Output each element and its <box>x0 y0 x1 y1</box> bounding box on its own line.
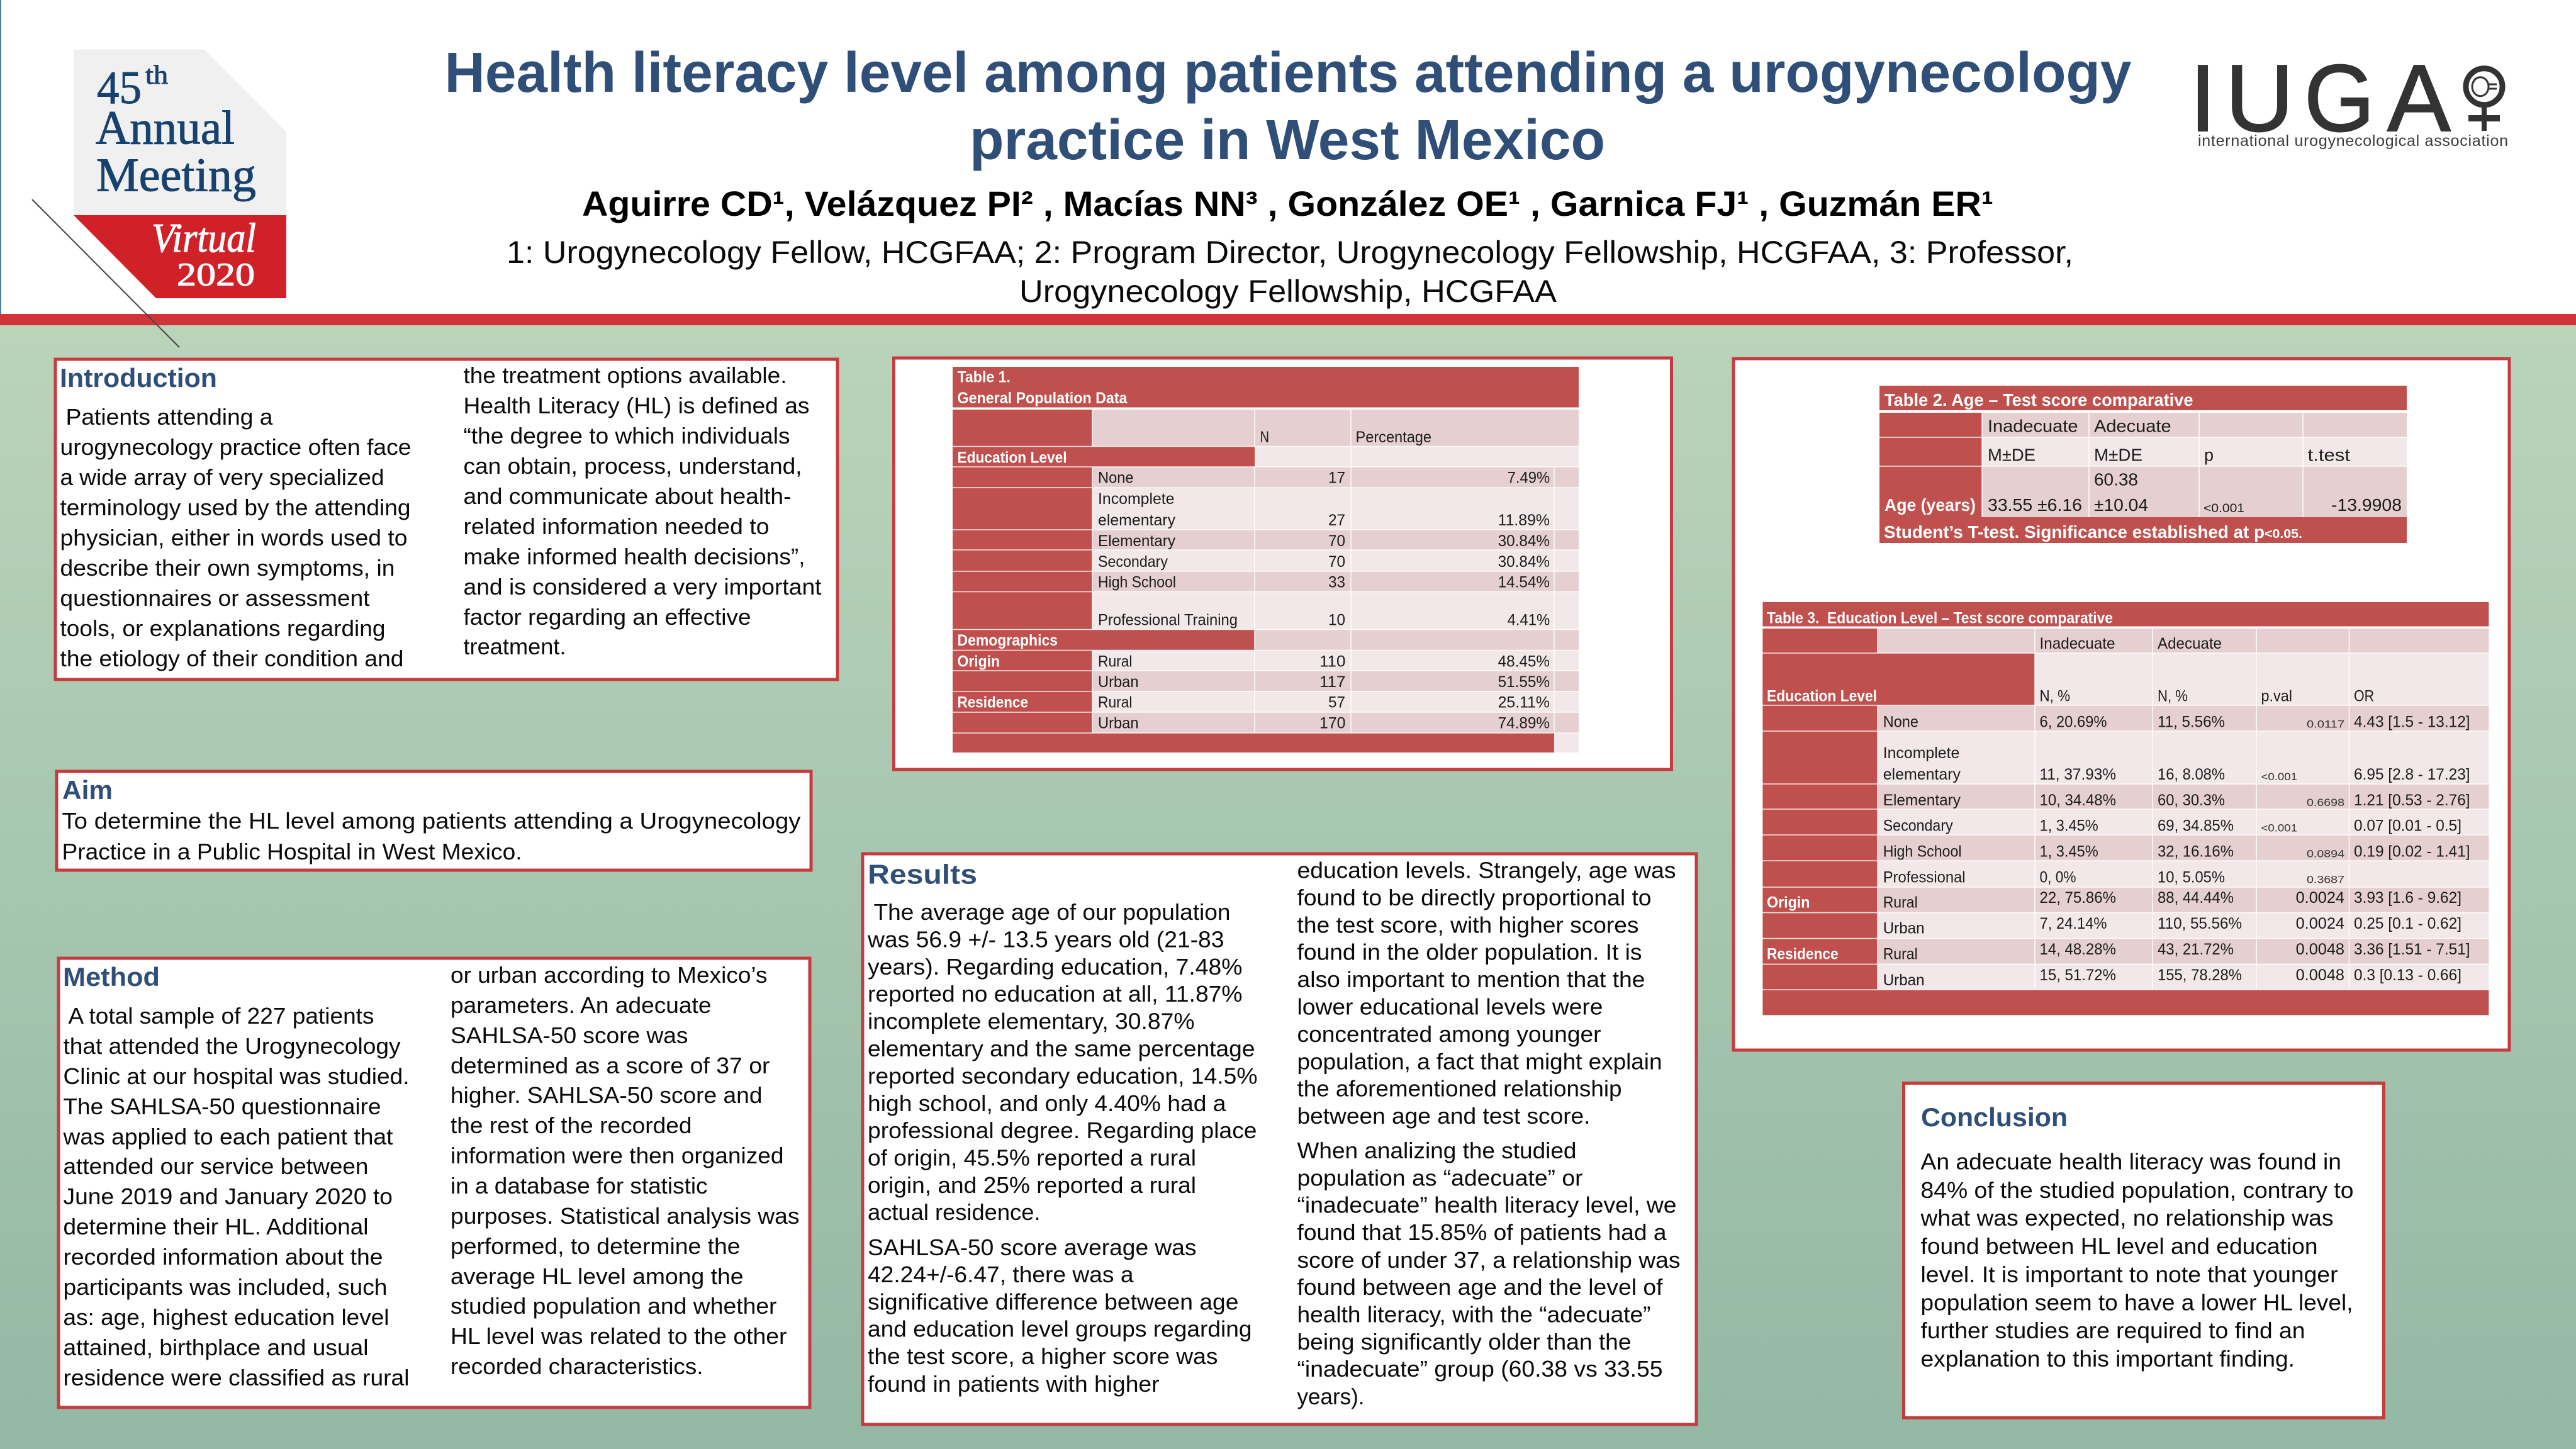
text block: results left column: and education level groups regarding <box>868 1316 1252 1341</box>
table 1 row headers: Residence <box>958 693 1028 711</box>
logo: 45th Annual Meeting Virtual 2020: th <box>145 61 168 90</box>
table 3 data: 11, 37.93% <box>2040 766 2116 783</box>
table 2 data: M±DE <box>2094 445 2142 465</box>
text block: conclusion: level. It is important to note that younger <box>1920 1262 2338 1287</box>
text block: aim: Practice in a Public Hospital in West Mexico. <box>62 839 522 864</box>
table 3 data: 0.25 [0.1 - 0.62] <box>2354 915 2461 932</box>
text block: introduction left column: Patients attending a <box>65 404 273 430</box>
heading: introduction: Introduction <box>60 363 217 393</box>
table 3 data: Inadecuate <box>2040 635 2115 652</box>
logo: 45th Annual Meeting Virtual 2020: Meeting <box>96 148 256 201</box>
logo: 45th Annual Meeting Virtual 2020 <box>74 49 286 298</box>
table 3 data: Urban <box>1883 971 1925 989</box>
table 3 data: Professional <box>1883 869 1966 887</box>
text block: introduction right column: Health Literacy (HL) is defined as <box>463 393 809 418</box>
text block: results right column: found to be directly proportional to <box>1297 885 1651 910</box>
table 1 data: 33 <box>1328 574 1345 591</box>
text block: results right column: concentrated among younger <box>1297 1021 1601 1047</box>
title <box>444 42 2132 172</box>
table 3 data: 110, 55.56% <box>2158 915 2242 932</box>
text block: method left column: recorded information about the <box>63 1244 383 1270</box>
text block: method right column: parameters. An adecuate <box>451 992 711 1018</box>
logo: 45th Annual Meeting Virtual 2020: 45 <box>97 62 142 114</box>
table 1 data: 70 <box>1328 532 1345 550</box>
table 1 data: 7.49% <box>1508 469 1550 487</box>
table 1 data: 170 <box>1319 715 1345 732</box>
table 3 data: 0.3 [0.13 - 0.66] <box>2354 966 2461 984</box>
table 1 data: Urban <box>1098 673 1139 691</box>
table 3 data: 3.36 [1.51 - 7.51] <box>2354 941 2470 958</box>
logo: 45th Annual Meeting Virtual 2020: Virtual <box>152 215 256 261</box>
table 1 data: Percentage <box>1355 428 1431 446</box>
table 3 data: 11, 5.56% <box>2158 713 2225 731</box>
text block: conclusion <box>1920 1149 2353 1372</box>
logo: 45th Annual Meeting Virtual 2020: Annual <box>96 102 235 155</box>
text block: results right column: score of under 37, a relationship was <box>1297 1247 1680 1273</box>
text block: results left column: The average age of our population <box>873 899 1231 925</box>
table 3 data: 0.0894 <box>2307 848 2344 859</box>
table 1 data <box>1098 428 1550 732</box>
table 1 data: 70 <box>1328 553 1345 571</box>
text block: conclusion: further studies are required to find an <box>1920 1318 2305 1343</box>
table 3 data: 6.95 [2.8 - 17.23] <box>2354 766 2470 783</box>
table 2 row header and footnote <box>1884 495 2302 542</box>
table 2: age test score comparative <box>1879 386 2407 543</box>
text block: introduction left column: questionnaires or assessment <box>60 585 370 611</box>
table 2 row header and footnote: Student’s T-test. Significance established at p <box>1884 522 2265 542</box>
text block: results right column <box>1297 857 1680 1409</box>
table 3 data: Rural <box>1883 894 1918 912</box>
table 1 title: Table 1. <box>958 369 1011 386</box>
text block: results right column: found in the older population. It is <box>1297 939 1642 965</box>
text block: results left column: origin, and 25% reported a rural <box>868 1172 1196 1198</box>
text block: introduction left column: describe their own symptoms, in <box>60 555 395 581</box>
text block: introduction left column: tools, or explanations regarding <box>60 615 385 641</box>
text block: method right column: purposes. Statistical analysis was <box>451 1203 799 1229</box>
table 3 data: 0.07 [0.01 - 0.5] <box>2354 817 2461 835</box>
text block: method left column: Clinic at our hospital was studied. <box>63 1063 409 1089</box>
table 1 data: 14.54% <box>1498 574 1550 591</box>
table 3 data: <0.001 <box>2261 822 2297 834</box>
text block: method left column: attended our service between <box>63 1153 369 1179</box>
table 3 title: Table 3. Education Level – Test score comparative <box>1767 610 2113 627</box>
text block: results right column: “inadecuate” group (60.38 vs 33.55 <box>1297 1356 1662 1382</box>
table 3 data: 69, 34.85% <box>2158 817 2234 835</box>
table 3 data <box>1883 635 2470 989</box>
table 3 data: OR <box>2354 688 2374 705</box>
table 3 data: 0, 0% <box>2040 869 2076 887</box>
authors: Aguirre CD¹, Velázquez PI² , Macías NN³ , González OE¹ , Garnica FJ¹ , Guzmán ER¹ <box>582 184 1993 223</box>
text block: conclusion: population seem to have a lower HL level, <box>1920 1290 2353 1315</box>
table 1 data: 27 <box>1328 512 1345 529</box>
text block: results right column: “inadecuate” health literacy level, we <box>1297 1192 1676 1218</box>
text block: introduction right column: the treatment options available. <box>463 362 787 388</box>
table 1 data: Rural <box>1098 693 1133 711</box>
text block: method right column: studied population and whether <box>451 1293 776 1319</box>
table 3 data: 0.0024 <box>2296 915 2344 932</box>
heading: method: Method <box>63 962 160 992</box>
panel: method <box>59 958 810 1407</box>
text block: conclusion: found between HL level and education <box>1920 1233 2318 1259</box>
table 3 data: p.val <box>2261 688 2292 705</box>
table 2 data: <0.001 <box>2204 502 2244 515</box>
text block: introduction left column: terminology used by the attending <box>60 495 410 520</box>
logo: IUGA: U <box>2226 45 2294 151</box>
table 1 row headers: Education Level <box>958 449 1067 467</box>
table 1 data: 51.55% <box>1498 673 1550 691</box>
text block: conclusion: An adecuate health literacy was found in <box>1920 1149 2341 1174</box>
text block: conclusion: 84% of the studied population, contrary to <box>1920 1177 2353 1203</box>
table 1 data: Professional Training <box>1098 612 1238 629</box>
panel: results <box>863 854 1696 1424</box>
table 3 data: 32, 16.16% <box>2158 843 2234 861</box>
text block: results right column: health literacy, with the “adecuate” <box>1297 1301 1651 1328</box>
text block: results right column: found that 15.85% of patients had a <box>1297 1219 1667 1245</box>
text block: results left column: of origin, 45.5% reported a rural <box>868 1145 1196 1171</box>
table 2 data: Inadecuate <box>1988 417 2078 436</box>
text block: conclusion: explanation to this important finding. <box>1920 1346 2295 1372</box>
text block: results right column: between age and test score. <box>1297 1103 1591 1129</box>
text block: method left column: The SAHLSA-50 questionnaire <box>63 1094 381 1119</box>
table 3 data: Rural <box>1883 945 1918 963</box>
text block: results right column: the aforementioned relationship <box>1297 1076 1622 1102</box>
table 3 row headers: Origin <box>1767 894 1810 912</box>
table 3 data: 0.0048 <box>2296 941 2344 958</box>
table 1 data: 4.41% <box>1508 612 1550 629</box>
text block: method left column <box>62 1003 410 1390</box>
logo: IUGA <box>2190 45 2508 151</box>
text block: results left column: the test score, a higher score was <box>868 1343 1218 1369</box>
text block: results left column: actual residence. <box>868 1199 1041 1225</box>
table 3 data: 155, 78.28% <box>2158 966 2242 984</box>
text block: results left column: elementary and the same percentage <box>868 1036 1255 1061</box>
table 2 data: t.test <box>2308 445 2350 465</box>
text block: method left column: participants was included, such <box>63 1274 388 1300</box>
heading: conclusion: Conclusion <box>1921 1102 2068 1132</box>
text block: results left column: significative difference between age <box>868 1289 1238 1315</box>
table 2 data: ±10.04 <box>2094 495 2148 515</box>
table 1 row headers: Origin <box>958 653 1000 671</box>
heading: aim: Aim <box>62 775 113 805</box>
text block: method left column: residence were classified as rural <box>63 1365 409 1390</box>
text block: method right column: or urban according to Mexico’s <box>451 962 768 988</box>
text block: results left column: years). Regarding education, 7.48% <box>868 954 1242 980</box>
text block: results right column: the test score, with higher scores <box>1297 912 1638 937</box>
affiliations <box>507 235 2073 309</box>
text block: results right column: When analizing the studied <box>1297 1138 1577 1163</box>
table 3 data: 0.3687 <box>2307 873 2344 886</box>
panel: tables 2 and 3 <box>1733 359 2509 1050</box>
table 3 data: Elementary <box>1883 792 1961 809</box>
text block: results right column: being significantly older than the <box>1297 1329 1631 1355</box>
table 2 data: p <box>2204 445 2214 465</box>
text block: method left column: that attended the Urogynecology <box>63 1033 401 1059</box>
table 2 data: M±DE <box>1988 445 2036 465</box>
table 3 data: elementary <box>1883 766 1961 783</box>
table 3 data: 60, 30.3% <box>2158 792 2225 809</box>
table 1 data: High School <box>1098 574 1176 591</box>
text block: results left column: 42.24+/-6.47, there was a <box>868 1262 1134 1287</box>
table 2 data: -13.9908 <box>2331 495 2402 515</box>
text block: conclusion: what was expected, no relationship was <box>1920 1205 2333 1231</box>
text block: introduction right column: factor regarding an effective <box>463 604 751 630</box>
text block: method right column: in a database for statistic <box>451 1173 707 1199</box>
text block: results left column: found in patients with higher <box>868 1371 1159 1397</box>
text block: method left column: A total sample of 227 patients <box>68 1003 374 1029</box>
title: Health literacy level among patients attending a urogynecology <box>444 42 2132 104</box>
text block: method right column: average HL level among the <box>451 1263 744 1289</box>
text block: method right column: determined as a score of 37 or <box>451 1053 770 1078</box>
table 2 row header and footnote: Age (years) <box>1884 495 1976 515</box>
table 3 data: 10, 34.48% <box>2040 792 2116 809</box>
diagonal line <box>32 199 179 347</box>
table 3 data: 10, 5.05% <box>2158 869 2225 887</box>
table 3 data: None <box>1883 713 1918 731</box>
panel: conclusion <box>1904 1083 2383 1418</box>
panel: aim <box>57 771 811 870</box>
text block: results left column: reported no education at all, 11.87% <box>868 981 1242 1007</box>
table 3: education level test score comparative <box>1762 602 2489 1015</box>
table 1 data: 110 <box>1319 653 1345 671</box>
table 1 data: 57 <box>1328 693 1345 711</box>
table 1 data: 74.89% <box>1498 715 1550 732</box>
table 3 data: 88, 44.44% <box>2158 889 2234 907</box>
text block: method right column: higher. SAHLSA-50 score and <box>451 1082 763 1108</box>
text block: results right column: found between age and the level of <box>1297 1274 1663 1300</box>
text block: results left column <box>867 899 1257 1397</box>
header red bar <box>0 314 2576 325</box>
table 1 data: 17 <box>1328 469 1345 487</box>
table 1 data: elementary <box>1098 512 1175 529</box>
text block: results left column: SAHLSA-50 score average was <box>868 1234 1197 1260</box>
table 1 data: Urban <box>1098 715 1139 732</box>
text block: method left column: June 2019 and January 2020 to <box>63 1183 393 1209</box>
table 2 data: Adecuate <box>2094 417 2171 436</box>
text block: introduction left column: the etiology of their condition and <box>60 646 404 671</box>
affiliations: Urogynecology Fellowship, HCGFAA <box>1019 274 1557 309</box>
table 1 title <box>958 369 1128 407</box>
table 1 row headers <box>958 449 1067 711</box>
text block: method right column: SAHLSA-50 score was <box>451 1022 688 1048</box>
logo: 45th Annual Meeting Virtual 2020: 2020 <box>177 257 255 293</box>
table 3 data: 22, 75.86% <box>2040 889 2116 907</box>
text block: method left column: attained, birthplace and usual <box>63 1334 369 1360</box>
table 3 data: Urban <box>1883 920 1925 937</box>
heading: results: Results <box>868 859 977 890</box>
table 3 data: 14, 48.28% <box>2040 941 2116 958</box>
text block: method right column: information were then organized <box>451 1143 784 1168</box>
table 1: general population data <box>953 367 1579 752</box>
text block: introduction left column: physician, either in words used to <box>60 525 408 551</box>
table 3 data: N, % <box>2158 688 2188 705</box>
table 2 data: 60.38 <box>2094 470 2138 490</box>
text block: aim <box>62 808 801 864</box>
table 3 data: Secondary <box>1883 817 1953 835</box>
text block: introduction right column: can obtain, process, understand, <box>463 453 802 479</box>
table 3 data: 6, 20.69% <box>2040 713 2107 731</box>
panel: table 1 <box>893 358 1671 769</box>
table 1 data: N <box>1260 428 1269 446</box>
table 3 data: 0.19 [0.02 - 1.41] <box>2354 843 2470 861</box>
table 3 data: 1.21 [0.53 - 2.76] <box>2354 792 2470 809</box>
table 3 data: 4.43 [1.5 - 13.12] <box>2354 713 2470 731</box>
text block: results right column: population as “adecuate” or <box>1297 1165 1583 1190</box>
text block: introduction right column: related information needed to <box>463 513 769 539</box>
text block: method right column: the rest of the recorded <box>451 1112 692 1138</box>
text block: results left column: was 56.9 +/- 13.5 years old (21-83 <box>867 926 1224 952</box>
text block: results right column: lower educational levels were <box>1297 994 1603 1019</box>
text block: results left column: professional degree. Regarding place <box>868 1117 1257 1143</box>
logo: IUGA: G <box>2304 45 2375 151</box>
table 2 title: Table 2. Age – Test score comparative <box>1884 390 2193 410</box>
table 1 data: Secondary <box>1098 553 1168 571</box>
table 1 data: 30.84% <box>1498 532 1550 550</box>
text block: results right column: also important to mention that the <box>1297 966 1645 992</box>
table 1 data: Elementary <box>1098 532 1175 550</box>
table 1 data: Incomplete <box>1098 490 1174 508</box>
text block: results left column: reported secondary education, 14.5% <box>868 1063 1257 1088</box>
panel: introduction <box>55 359 837 680</box>
table 1 data: 117 <box>1319 673 1345 691</box>
table 1 data: 48.45% <box>1498 653 1550 671</box>
table 3 data: 43, 21.72% <box>2158 941 2234 958</box>
text block: method left column: was applied to each patient that <box>62 1124 393 1150</box>
table 2 row header and footnote: <0.05. <box>2265 527 2302 541</box>
logo: IUGA: A <box>2387 45 2451 151</box>
table 3 data: Adecuate <box>2158 635 2222 652</box>
text block: results right column: years). <box>1297 1384 1364 1409</box>
text block: results left column: incomplete elementary, 30.87% <box>868 1009 1194 1034</box>
table 3 data: 1, 3.45% <box>2040 817 2098 835</box>
text block: method left column: determine their HL. Additional <box>63 1214 369 1239</box>
table 3 row headers <box>1767 688 1877 963</box>
text block: introduction left column <box>60 404 412 671</box>
logo: IUGA: I <box>2190 45 2216 151</box>
text block: aim: To determine the HL level among patients attending a Urogynecology <box>62 808 801 834</box>
text block: introduction right column: “the degree to which individuals <box>463 423 790 449</box>
table 3 data: N, % <box>2040 688 2070 705</box>
table 1 row headers: Demographics <box>958 632 1058 649</box>
table 1 data: 25.11% <box>1498 693 1550 711</box>
title: practice in West Mexico <box>970 109 1605 172</box>
table 1 data: None <box>1098 469 1134 487</box>
table 2 data <box>1988 417 2402 515</box>
table 2 data: 33.55 ±6.16 <box>1988 495 2082 515</box>
text block: method right column: recorded characteristics. <box>451 1353 703 1379</box>
text block: results right column: education levels. Strangely, age was <box>1297 857 1676 883</box>
table 3 data: <0.001 <box>2261 771 2297 783</box>
table 1 title: General Population Data <box>958 389 1128 407</box>
text block: method right column: performed, to determine the <box>451 1233 740 1259</box>
page background <box>0 325 2576 1449</box>
text block: results left column: high school, and only 4.40% had a <box>868 1090 1226 1116</box>
text block: introduction left column: a wide array of very specialized <box>60 464 384 490</box>
text block: results right column: population, a fact that might explain <box>1297 1048 1662 1074</box>
table 3 data: 0.0024 <box>2296 889 2344 907</box>
text block: method right column <box>451 962 799 1379</box>
table 1 data: 30.84% <box>1498 553 1550 571</box>
table 3 data: High School <box>1883 843 1962 861</box>
table 3 data: 7, 24.14% <box>2040 915 2107 932</box>
text block: introduction right column: treatment. <box>463 634 566 659</box>
text block: introduction right column: and is considered a very important <box>463 574 822 600</box>
table 3 data: 0.6698 <box>2307 797 2344 808</box>
table 3 data: 15, 51.72% <box>2040 966 2116 984</box>
text block: introduction right column <box>463 362 822 659</box>
text block: introduction right column: and communicate about health- <box>463 483 792 509</box>
table 3 row headers: Residence <box>1767 945 1839 963</box>
table 1 data: 10 <box>1328 612 1345 629</box>
table 3 data: Incomplete <box>1883 744 1959 762</box>
text block: method right column: HL level was related to the other <box>451 1323 787 1349</box>
table 1 data: 11.89% <box>1498 512 1550 529</box>
table 3 data: 16, 8.08% <box>2158 766 2225 783</box>
logo: IUGA: international urogynecological association <box>2198 132 2508 150</box>
affiliations: 1: Urogynecology Fellow, HCGFAA; 2: Program Director, Urogynecology Fellowship, HCGFAA, 3: Professor, <box>507 235 2073 270</box>
table 3 data: 3.93 [1.6 - 9.62] <box>2354 889 2461 907</box>
table 1 data: Rural <box>1098 653 1133 671</box>
table 3 data: 0.0048 <box>2296 966 2344 984</box>
text block: introduction left column: urogynecology practice often face <box>60 434 412 460</box>
table 3 row headers: Education Level <box>1767 688 1877 705</box>
table 3 data: 1, 3.45% <box>2040 843 2098 861</box>
text block: introduction right column: make informed health decisions”, <box>463 544 805 569</box>
text block: method left column: as: age, highest education level <box>63 1304 389 1330</box>
table 3 data: 0.0117 <box>2307 719 2344 730</box>
